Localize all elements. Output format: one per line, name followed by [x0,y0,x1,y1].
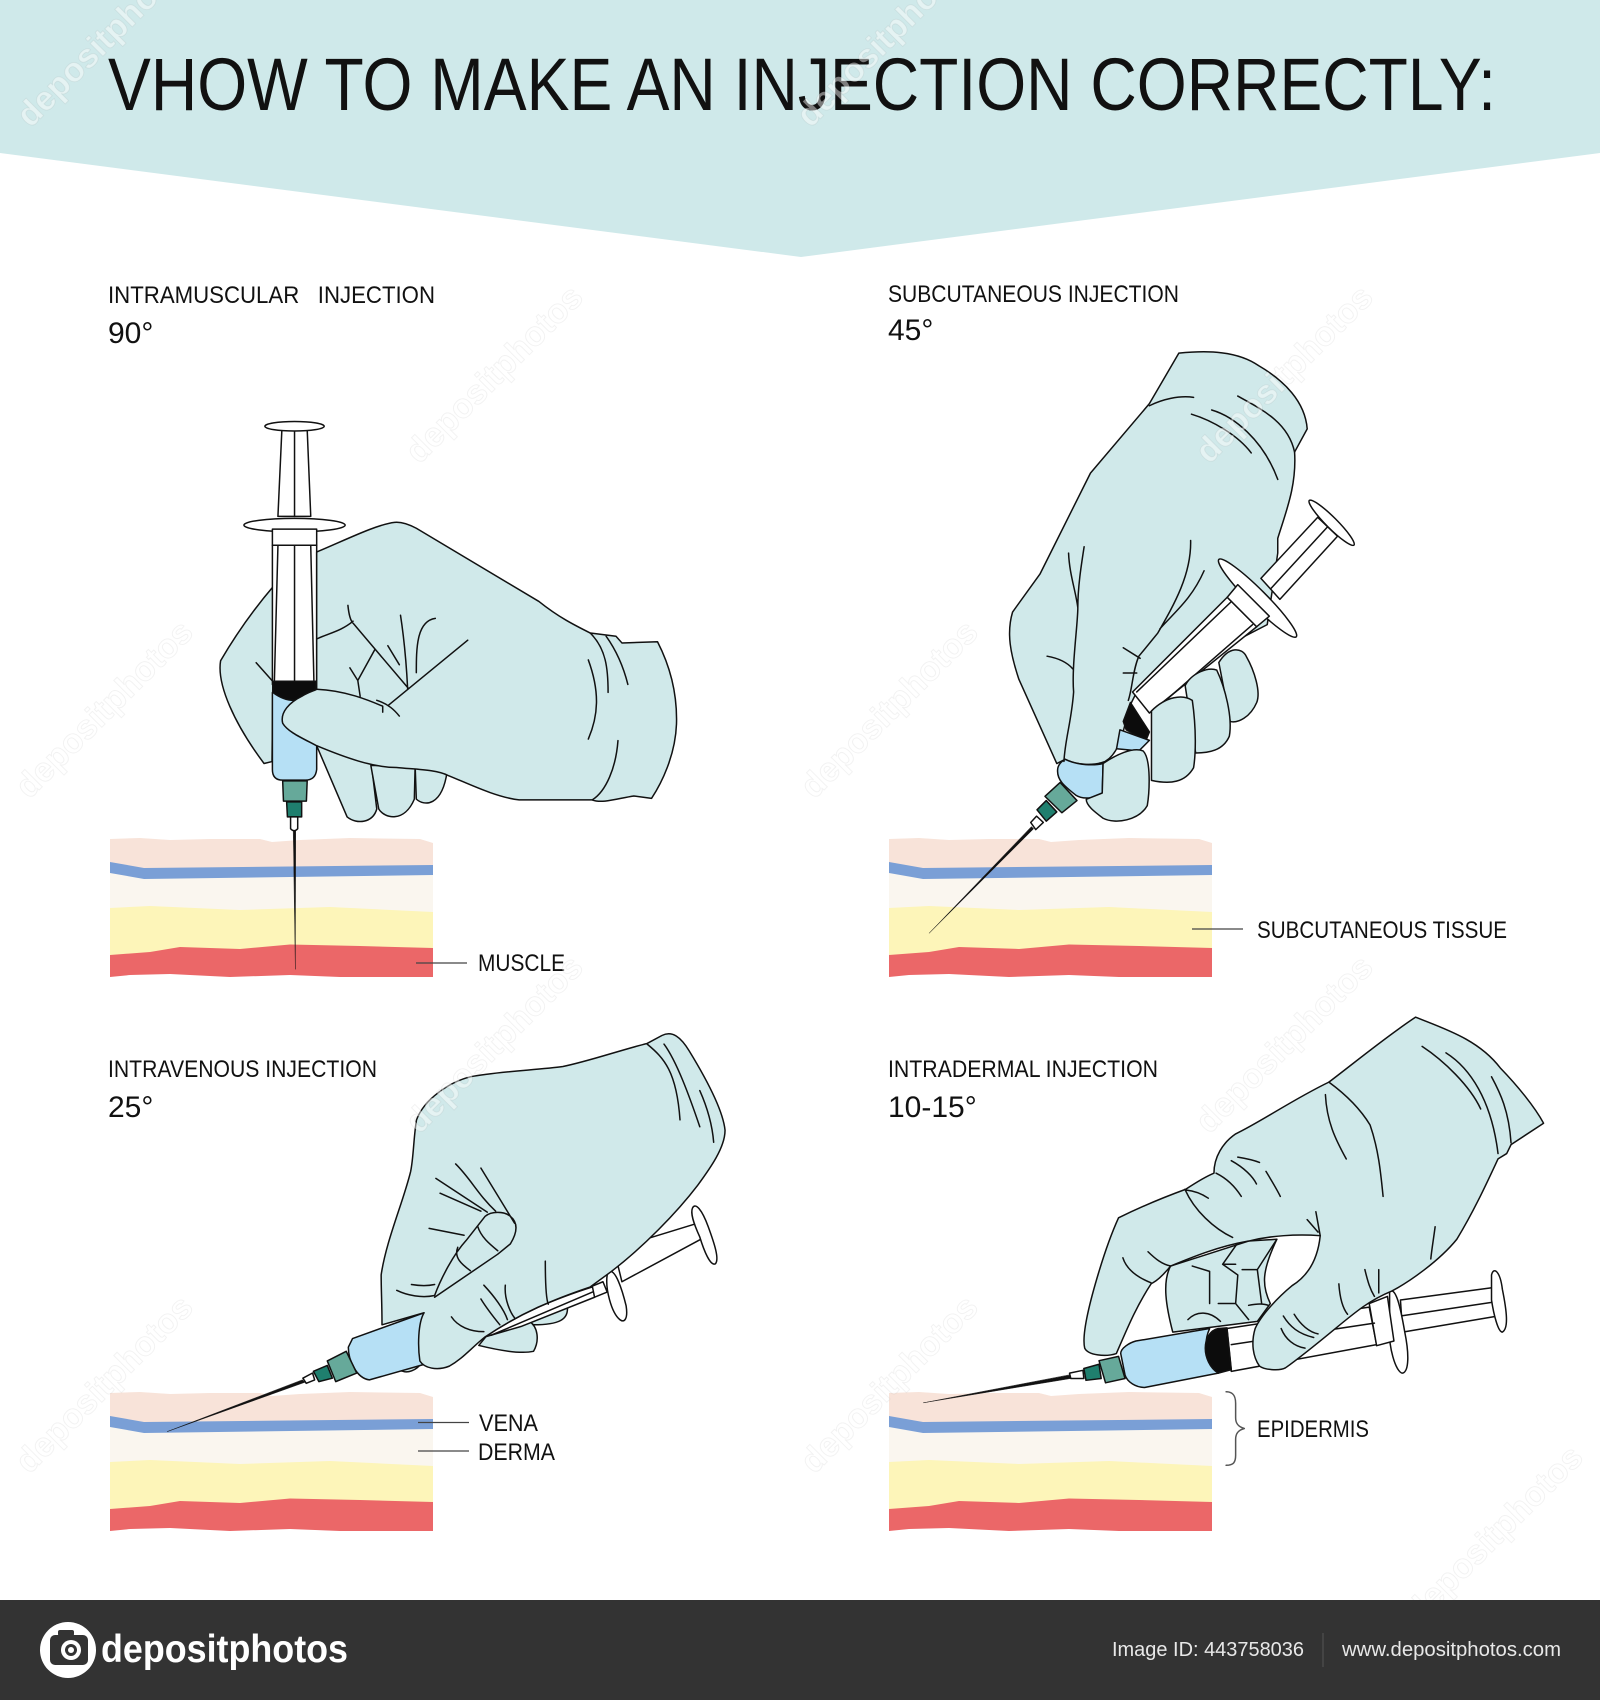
text: depositphotos [1188,948,1381,1141]
heading: intramuscular: INTRAMUSCULAR INJECTION [108,282,435,309]
text: depositphotos [8,1288,201,1481]
hand and syringe: 90 degrees [220,422,677,969]
label: muscle: MUSCLE [478,950,565,977]
footer bar [0,1600,1600,1700]
skin layers [110,838,433,977]
panel: subcutaneous injection [888,281,1507,977]
text: depositphotos [1188,278,1381,471]
heading: subcutaneous: SUBCUTANEOUS INJECTION [888,281,1179,308]
hand and syringe: 25 degrees [167,1034,725,1432]
leader line: muscle [416,962,467,964]
hand and syringe: 45 degrees [929,352,1358,933]
leader line: derma [418,1450,469,1452]
text: depositphotos [8,613,201,806]
leader line: subcutaneous tissue [1192,928,1243,930]
leader line: vena [418,1422,469,1424]
angle: 45 degrees: 45° [888,314,933,347]
angle: 25 degrees: 25° [108,1091,153,1124]
text: depositphotos [793,1288,986,1481]
skin layers [889,1392,1212,1531]
icon: camera logo [40,1622,96,1678]
heading: intradermal: INTRADERMAL INJECTION [888,1056,1158,1083]
panel: intramuscular injection [108,282,677,977]
text: depositphotos [1398,1438,1591,1631]
header band [0,0,1600,257]
heading: intravenous: INTRAVENOUS INJECTION [108,1056,377,1083]
label: vena: VENA [479,1410,538,1437]
angle: 90 degrees: 90° [108,317,153,350]
label: subcutaneous tissue: SUBCUTANEOUS TISSUE [1257,917,1507,944]
skin layers [889,838,1212,977]
skin layers [110,1392,433,1531]
hand and syringe: 10-15 degrees [923,1017,1544,1465]
image id: Image ID: 443758036 [1112,1639,1304,1661]
label: derma: DERMA [478,1439,555,1466]
angle: 10-15 degrees: 10-15° [888,1091,977,1124]
text: depositphotos [398,278,591,471]
text: depositphotos [398,948,591,1141]
text: depositphotos [793,613,986,806]
panel: intradermal injection [888,1017,1544,1531]
website: www.depositphotos.com [1341,1639,1561,1661]
brand name: depositphotos [101,1628,348,1671]
panel: intravenous injection [108,1034,725,1531]
label: epidermis: EPIDERMIS [1257,1416,1369,1443]
